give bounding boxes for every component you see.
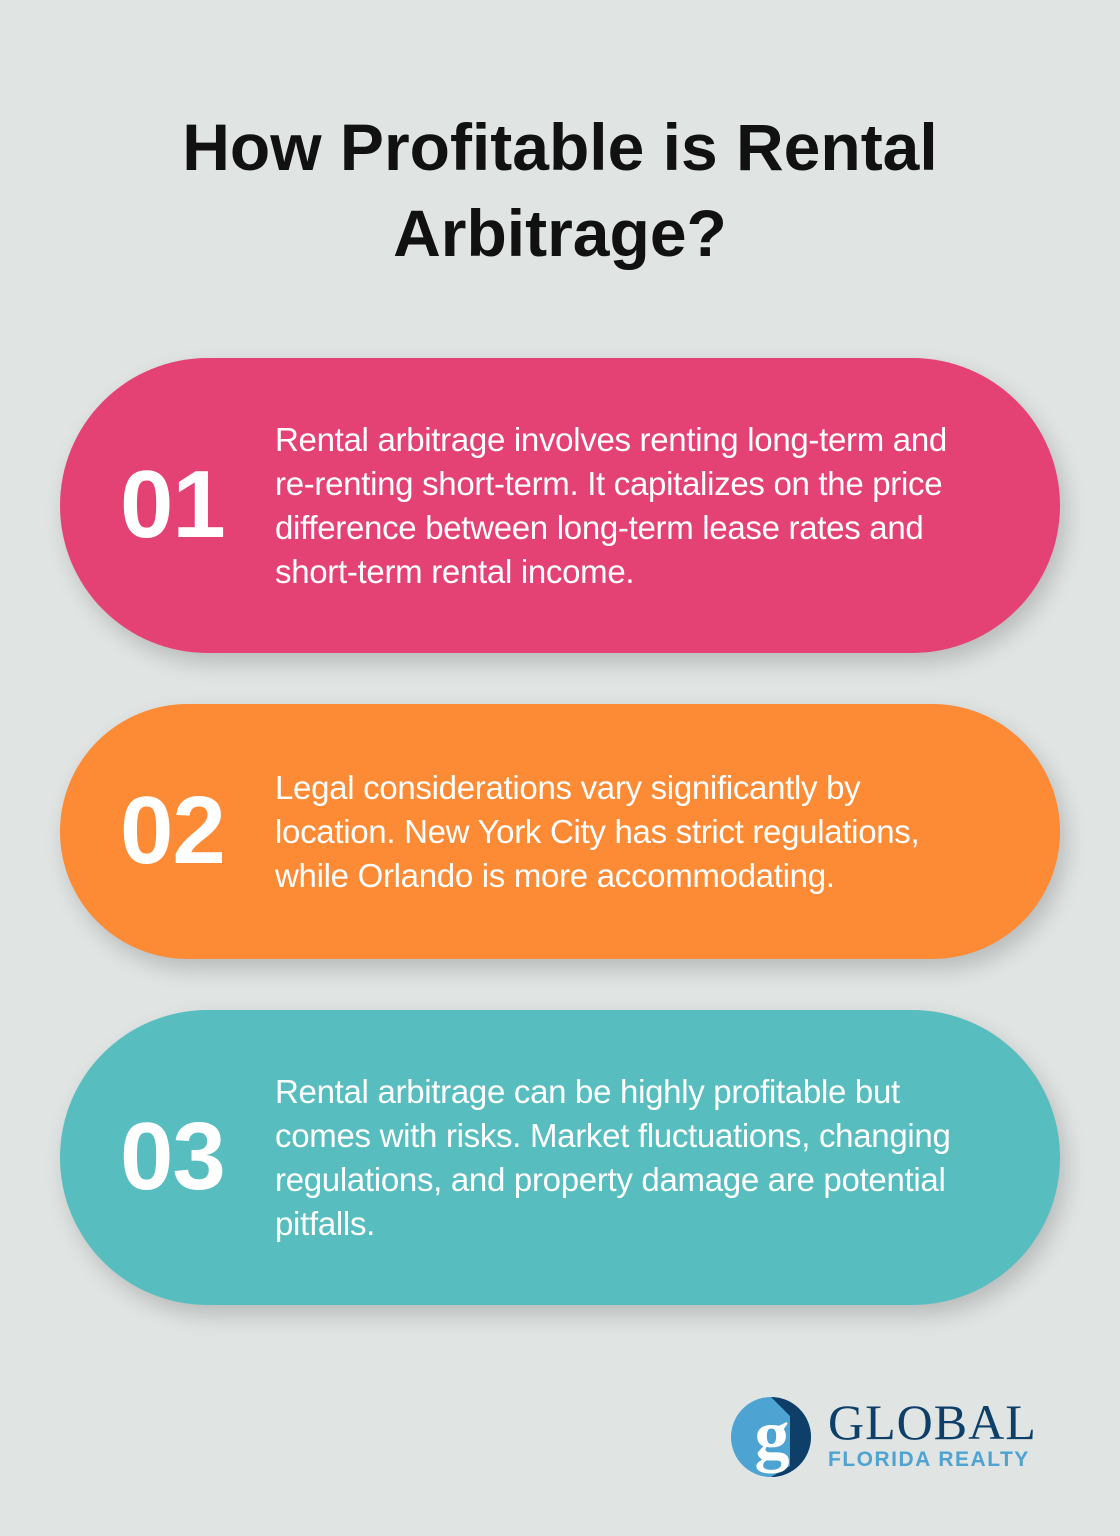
title: Arbitrage? — [393, 196, 727, 270]
text 03: comes with risks. Market fluctuations, changing — [275, 1117, 951, 1154]
number 03: 03 — [120, 1103, 225, 1210]
text 02: Legal considerations vary significantly by — [275, 769, 860, 806]
text 01: difference between long-term lease rates and — [275, 509, 923, 546]
title — [182, 110, 938, 270]
logo — [731, 1394, 1037, 1477]
text 01 — [275, 421, 947, 590]
text 03: pitfalls. — [275, 1205, 375, 1242]
text 03: regulations, and property damage are potential — [275, 1161, 945, 1198]
icon: logo circle: g — [754, 1397, 790, 1474]
text 02: location. New York City has strict regulations, — [275, 813, 919, 850]
panel: 02 — [60, 704, 1060, 959]
panel: 01 — [60, 358, 1060, 653]
text 01: short-term rental income. — [275, 553, 634, 590]
text 01: Rental arbitrage involves renting long-term and — [275, 421, 947, 458]
text 02: while Orlando is more accommodating. — [275, 857, 835, 894]
text 01: re-renting short-term. It capitalizes on the price — [275, 465, 942, 502]
number 02: 02 — [120, 777, 225, 884]
text 02 — [275, 769, 919, 894]
logo text: GLOBAL — [828, 1394, 1037, 1450]
text 03 — [275, 1073, 951, 1242]
number 01: 01 — [120, 451, 225, 558]
panel: 03 — [60, 1010, 1060, 1305]
logo: FLORIDA REALTY — [828, 1448, 1030, 1471]
title: How Profitable is Rental — [182, 110, 938, 184]
text 03: Rental arbitrage can be highly profitable but — [275, 1073, 900, 1110]
icon: logo circle — [731, 1397, 811, 1477]
